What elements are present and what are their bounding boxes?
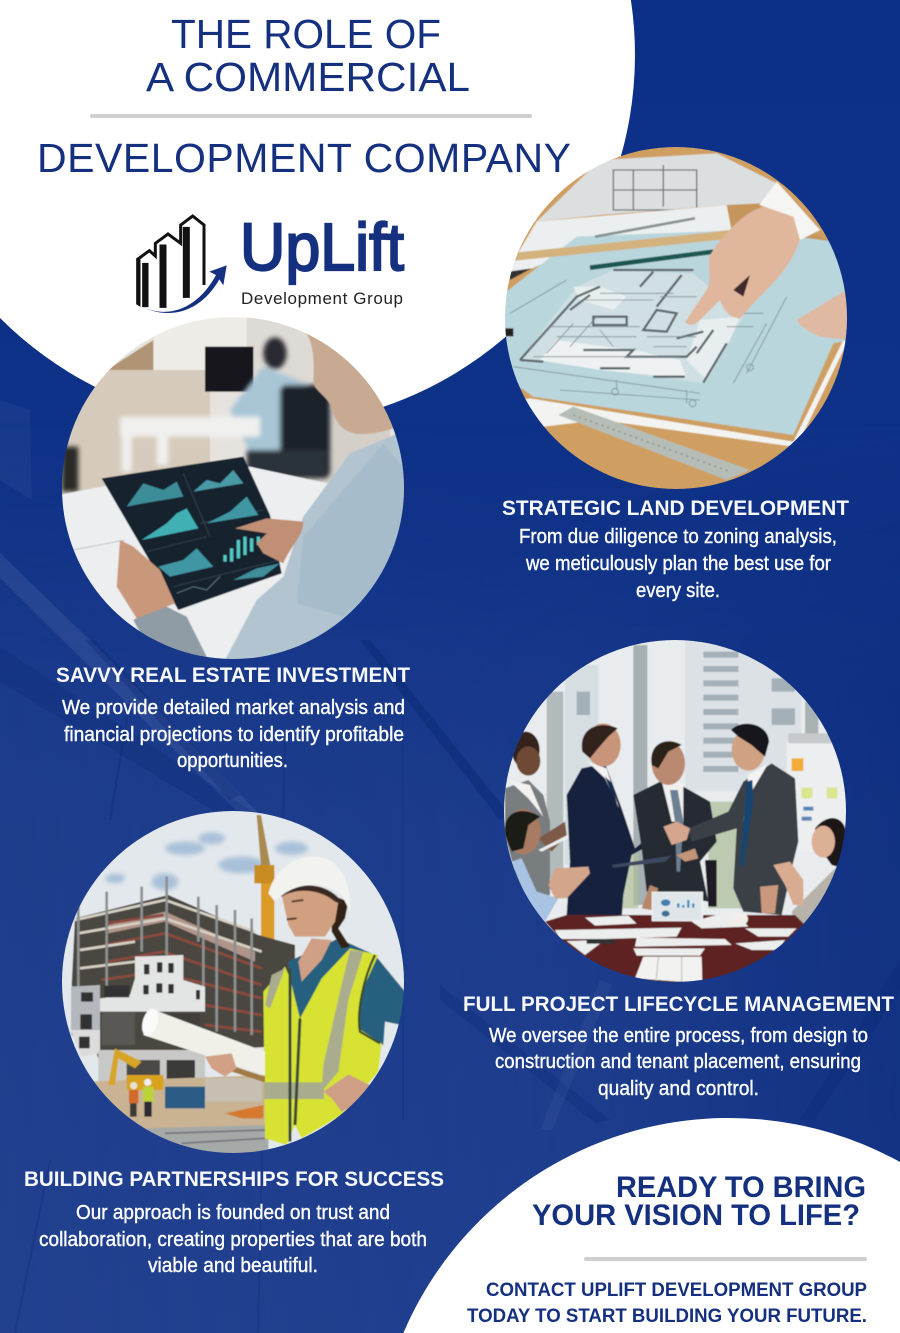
title: A COMMERCIAL — [146, 54, 470, 100]
logo: UpLift Development Group: Development Group — [241, 289, 403, 308]
text block: savvy real estate investment: financial projections to identify profitable — [64, 724, 404, 746]
logo: UpLift Development Group — [137, 210, 404, 313]
hand — [685, 207, 805, 325]
text block: strategic land development: we meticulously plan the best use for — [525, 553, 831, 575]
building — [72, 895, 295, 1058]
tablet — [102, 457, 282, 610]
text block: full project lifecycle management: quality and control. — [598, 1078, 759, 1100]
text block: building partnerships for success: Our approach is founded on trust and — [76, 1202, 390, 1224]
title: THE ROLE OF — [171, 11, 441, 57]
woman right — [815, 818, 847, 868]
text block: strategic land development: STRATEGIC LAND DEVELOPMENT — [502, 497, 849, 520]
whiteboard — [786, 742, 802, 792]
ground — [94, 1074, 266, 1132]
call to action: TODAY TO START BUILDING YOUR FUTURE. — [467, 1305, 867, 1327]
hands — [235, 518, 303, 563]
photo: architect pointing at blueprint — [500, 140, 860, 490]
table — [545, 915, 815, 985]
title: DEVELOPMENT COMPANY — [37, 135, 571, 181]
crane — [260, 878, 275, 940]
text block: building partnerships for success: BUILDING PARTNERSHIPS FOR SUCCESS — [24, 1168, 444, 1191]
hair and face — [332, 895, 350, 948]
bottom white circle panel — [403, 1118, 900, 1333]
text block: full project lifecycle management: FULL PROJECT LIFECYCLE MANAGEMENT — [463, 993, 894, 1016]
plan roll and hands — [143, 1009, 265, 1075]
call to action: READY TO BRING — [616, 1171, 866, 1204]
woman: arm and shirt — [288, 938, 404, 1046]
call to action — [467, 1171, 867, 1327]
photo: engineer at construction site — [55, 805, 415, 1155]
text block: building partnerships for success: viable and beautiful. — [148, 1255, 318, 1277]
foreground person — [306, 333, 394, 434]
text block: building partnerships for success — [24, 1168, 444, 1277]
photo: analyst with tablet of charts — [62, 317, 404, 659]
text block: building partnerships for success: collaboration, creating properties that are both — [39, 1229, 427, 1251]
call to action: YOUR VISION TO LIFE? — [532, 1199, 860, 1232]
floor plan — [520, 270, 743, 383]
text block: full project lifecycle management — [463, 993, 894, 1100]
text block: savvy real estate investment — [56, 664, 410, 772]
woman left — [512, 732, 540, 768]
top white circle panel — [0, 0, 635, 427]
photo: team handshake in meeting room — [495, 635, 855, 985]
man front left — [514, 808, 541, 855]
text block: strategic land development: every site. — [636, 580, 720, 602]
man right — [688, 763, 798, 915]
text block: savvy real estate investment: We provide detailed market analysis and — [62, 697, 405, 719]
text block: savvy real estate investment: SAVVY REAL ESTATE INVESTMENT — [56, 664, 410, 687]
text block: full project lifecycle management: We oversee the entire process, from design to — [489, 1025, 868, 1047]
text block: strategic land development — [502, 497, 849, 602]
man left — [566, 766, 642, 916]
background: blue architectural panel — [0, 400, 900, 1333]
text block: full project lifecycle management: construction and tenant placement, ensuring — [495, 1051, 861, 1073]
man middle — [633, 782, 717, 902]
text block: strategic land development: From due diligence to zoning analysis, — [519, 526, 837, 548]
text block: savvy real estate investment: opportunities. — [177, 750, 288, 772]
icon: buildings with rising arrow — [137, 216, 227, 313]
hi-vis vest — [263, 948, 382, 1145]
title — [37, 11, 571, 181]
call to action: CONTACT UPLIFT DEVELOPMENT GROUP — [486, 1279, 867, 1301]
logo: UpLift Development Group: UpLift — [240, 210, 404, 285]
